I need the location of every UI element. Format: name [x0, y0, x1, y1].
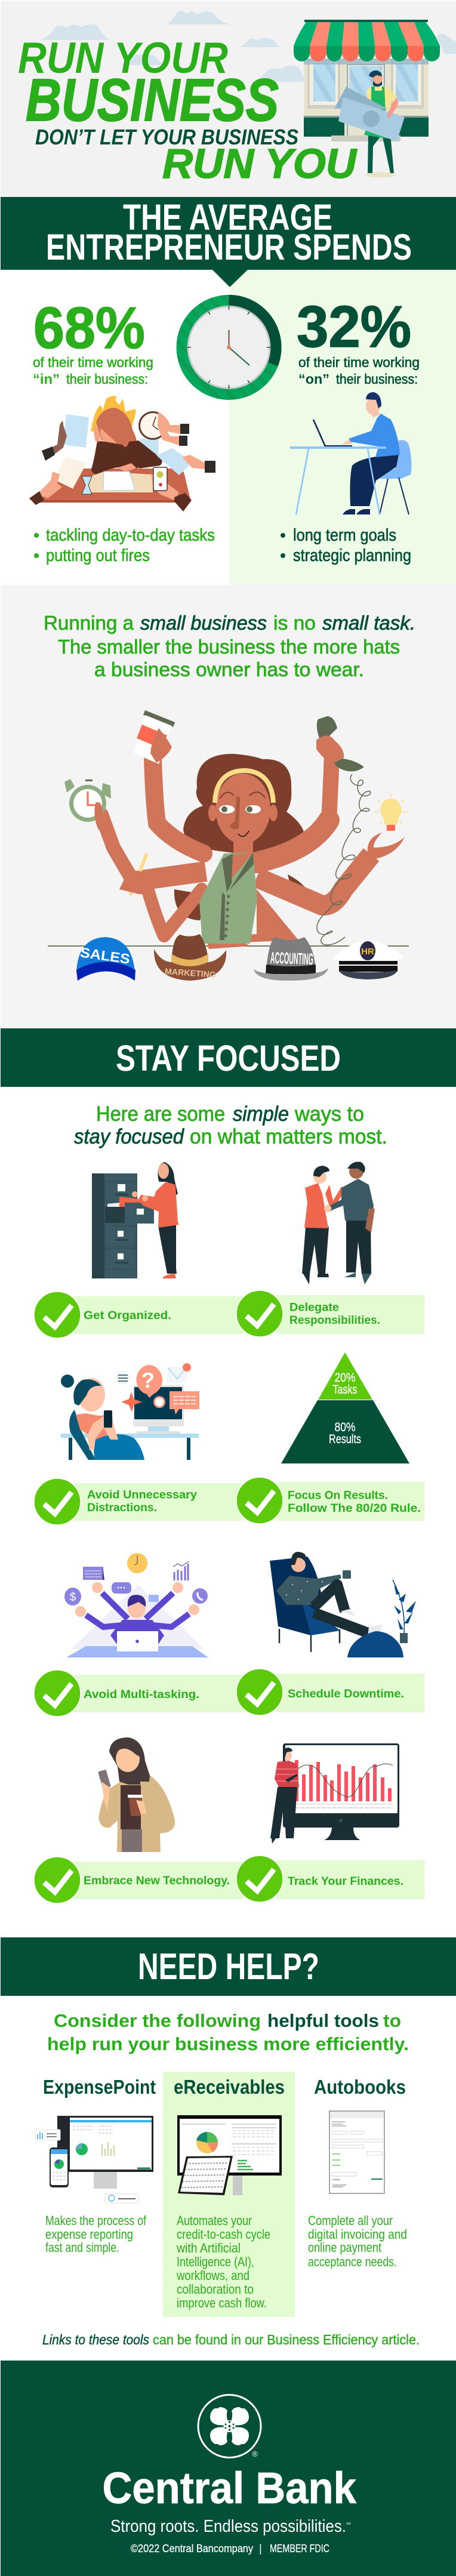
- checklist: avoid unnecessary distractions: Avoid Unnecessary: [87, 1489, 197, 1502]
- text: copyright and fdic: ©2022 Central Bancompany: [131, 2542, 254, 2555]
- list: in the business tasks: tackling day-to-day tasks: [46, 526, 215, 545]
- text: autobooks description: online payment: [308, 2240, 381, 2255]
- text: copyright and fdic: MEMBER FDIC: [270, 2542, 329, 2555]
- text: expensepoint description: [45, 2213, 147, 2255]
- heading: stay focused: STAY FOCUSED: [116, 1038, 341, 1079]
- icon: distracted woman at computer: ?: [141, 1368, 155, 1392]
- checklist: embrace new technology: [34, 1857, 244, 1903]
- icon: multitasking man with many arms: [64, 1553, 208, 1657]
- checklist: delegate responsibilities: Delegate: [289, 1301, 339, 1314]
- chart: 80/20 pyramid: Results: [329, 1432, 361, 1446]
- list: on the business tasks: [281, 526, 411, 565]
- panel: ereceivables: [163, 2072, 295, 2317]
- heading: autobooks: Autobooks: [314, 2076, 406, 2098]
- checklist: focus on results: Focus On Results.: [288, 1490, 388, 1502]
- title: run your business: RUN YOU: [162, 140, 357, 187]
- text: tagline: Strong roots. Endless possibilities.: [110, 2517, 346, 2536]
- chart: 80/20 pyramid: [281, 1352, 409, 1463]
- text: simple ways intro: Here are some: [96, 1102, 225, 1126]
- checklist: get organized: Get Organized.: [84, 1309, 171, 1322]
- title: run your business: [18, 34, 357, 187]
- panel: many hats: [0, 585, 456, 1028]
- text: tagline: SM: [346, 2522, 351, 2526]
- text: links to these tools: [42, 2332, 420, 2347]
- chart: clock divided 68/32: [177, 295, 282, 400]
- stat: 32 percent on: “on”: [298, 371, 329, 387]
- text: simple ways intro: ways to: [294, 1102, 364, 1126]
- icon: sales cap: [76, 937, 135, 981]
- chart: 80/20 pyramid: 80%: [334, 1421, 356, 1434]
- icon: shop with owner holding money: [294, 20, 440, 178]
- heading: the average entrepreneur spends: [46, 197, 412, 267]
- icon: accounting fedora: [254, 937, 328, 981]
- heading: the average entrepreneur spends: THE AVERAGE: [123, 197, 332, 238]
- stat: 68 percent in: their business:: [66, 371, 148, 387]
- text: running a small business: The smaller the business the more hats: [58, 636, 400, 658]
- panel: footer: [0, 2361, 456, 2576]
- text: running a small business: small business: [140, 612, 267, 634]
- text: running a small business: [44, 612, 415, 680]
- text: helpful tools intro: to: [383, 2010, 401, 2031]
- text: simple ways intro: [74, 1102, 387, 1148]
- text: expensepoint description: Makes the process of: [45, 2213, 147, 2228]
- checklist: embrace new technology: Embrace New Technology.: [84, 1875, 230, 1887]
- icon: accounting fedora: ACCOUNTING: [270, 949, 314, 968]
- text: copyright and fdic: [131, 2542, 329, 2555]
- banner pointer: [212, 270, 248, 287]
- list: on the business tasks: long term goals: [293, 526, 396, 545]
- checklist: get organized: [34, 1292, 244, 1338]
- checklist: track your finances: [236, 1856, 425, 1902]
- heading: expensepoint: ExpensePoint: [43, 2076, 156, 2098]
- icon: expensepoint devices: [35, 2116, 153, 2203]
- text: autobooks description: [308, 2213, 407, 2269]
- text: links to these tools: Links to these tools: [42, 2332, 149, 2347]
- list: in the business tasks: [34, 526, 215, 565]
- list: on the business tasks: strategic planning: [293, 546, 411, 565]
- text: helpful tools intro: Consider the following: [54, 2010, 261, 2031]
- icon: overwhelmed woman at desk: [29, 396, 215, 511]
- text: ereceivables description: workflows, and: [176, 2268, 249, 2283]
- text: ereceivables description: collaboration to: [177, 2282, 254, 2297]
- text: ereceivables description: with Artificial: [176, 2241, 241, 2255]
- text: running a small business: is no: [273, 612, 316, 634]
- logo: central bank dogwood: [198, 2395, 261, 2458]
- text: simple ways intro: on what matters most.: [190, 1125, 387, 1148]
- title: run your business: DON’T LET YOUR BUSINESS: [35, 125, 298, 149]
- chart: man with monitor bar chart: [270, 1743, 399, 1844]
- checklist: focus on results: [236, 1477, 425, 1524]
- text: helpful tools intro: helpful tools: [267, 2010, 379, 2031]
- text: central bank wordmark: Central Bank: [103, 2463, 357, 2513]
- checklist: avoid unnecessary distractions: [34, 1478, 244, 1525]
- chart: 80/20 pyramid: Tasks: [333, 1383, 357, 1397]
- checklist: delegate responsibilities: Responsibilities.: [289, 1314, 380, 1327]
- text: autobooks description: digital invoicing and: [308, 2227, 407, 2242]
- text: ereceivables description: credit-to-cash cycle: [177, 2227, 270, 2242]
- icon: woman with phone and coffee: [98, 1737, 175, 1852]
- title: run your business: RUN YOUR: [18, 34, 228, 82]
- text: helpful tools intro: [47, 2010, 409, 2054]
- checklist: schedule downtime: [236, 1669, 425, 1715]
- text: expensepoint description: expense reporting: [45, 2227, 133, 2242]
- text: simple ways intro: simple: [233, 1102, 289, 1126]
- text: simple ways intro: stay focused: [74, 1125, 184, 1148]
- text: ereceivables description: improve cash flow.: [177, 2295, 267, 2310]
- stat: 68 percent in: [33, 295, 153, 387]
- text: autobooks description: acceptance needs.: [308, 2254, 397, 2269]
- panel: stay focused banner: [0, 1028, 456, 1087]
- icon: sales cap: SALES: [79, 944, 131, 967]
- checklist: track your finances: Track Your Finances.: [288, 1875, 403, 1888]
- text: autobooks description: Complete all your: [308, 2213, 393, 2228]
- icon: multitasking man with many arms: $: [70, 1591, 76, 1604]
- text: running a small business: a business owner has to wear.: [94, 658, 364, 680]
- stat: 68 percent in: “in”: [33, 371, 60, 387]
- heading: need help: NEED HELP?: [138, 1946, 319, 1988]
- title: run your business: BUSINESS: [26, 67, 279, 134]
- icon: man relaxing in armchair: [270, 1552, 416, 1657]
- text: ereceivables description: Automates your: [177, 2213, 252, 2228]
- logo: central bank dogwood: ®: [252, 2449, 258, 2458]
- checklist: avoid multi-tasking: Avoid Multi-tasking.: [84, 1688, 199, 1701]
- checklist: schedule downtime: Schedule Downtime.: [288, 1688, 404, 1700]
- stat: 32 percent on: their business:: [336, 371, 418, 387]
- text: running a small business: small task.: [322, 612, 415, 634]
- text: expensepoint description: fast and simple.: [45, 2240, 119, 2255]
- icon: woman at filing cabinet: [92, 1162, 179, 1278]
- stat: 68 percent in: 68%: [33, 295, 145, 360]
- checklist: avoid unnecessary distractions: Distractions.: [87, 1502, 157, 1514]
- heading: ereceivables: eReceivables: [174, 2076, 285, 2098]
- icon: hr captain hat: [332, 941, 403, 979]
- text: copyright and fdic: |: [259, 2542, 262, 2555]
- checklist: avoid multi-tasking: [34, 1670, 244, 1717]
- panel: 68 vs 32 comparison: [29, 270, 456, 585]
- checklist: focus on results: Follow The 80/20 Rule.: [288, 1502, 421, 1515]
- text: ereceivables description: [176, 2213, 270, 2310]
- icon: autobooks invoice: [329, 2111, 384, 2193]
- text: links to these tools: can be found in our Business Efficiency article.: [153, 2332, 420, 2347]
- icon: marketing cowboy hat: MARKETING: [165, 966, 217, 979]
- chart: 80/20 pyramid: 20%: [334, 1371, 356, 1385]
- panel: average entrepreneur banner: [0, 197, 456, 270]
- icon: multitasking woman with six arms: [48, 710, 409, 949]
- icon: ereceivables devices: [177, 2115, 282, 2195]
- stat: 32 percent on: of their time working: [298, 355, 420, 370]
- panel: need help banner: [0, 1937, 456, 1996]
- stat: 32 percent on: 32%: [297, 294, 411, 359]
- icon: hr captain hat: HR: [361, 947, 374, 957]
- icon: distracted woman at computer: [61, 1363, 199, 1460]
- panel: expensepoint: [35, 2076, 156, 2255]
- icon: marketing cowboy hat: [154, 934, 226, 981]
- icon: two colleagues shaking hands: [302, 1161, 375, 1284]
- stat: 32 percent on: [297, 294, 420, 387]
- list: in the business tasks: putting out fires: [46, 546, 150, 565]
- clouds: [41, 11, 456, 82]
- text: ereceivables description: Intelligence (AI),: [177, 2254, 254, 2269]
- checklist: delegate responsibilities: [236, 1290, 425, 1337]
- panel: autobooks: [308, 2076, 407, 2269]
- text: running a small business: Running a: [44, 612, 134, 634]
- stat: 68 percent in: of their time working: [33, 355, 153, 370]
- icon: calm man at laptop: [290, 392, 411, 514]
- panel: hero: [0, 0, 456, 197]
- text: helpful tools intro: help run your business more efficiently.: [47, 2033, 409, 2054]
